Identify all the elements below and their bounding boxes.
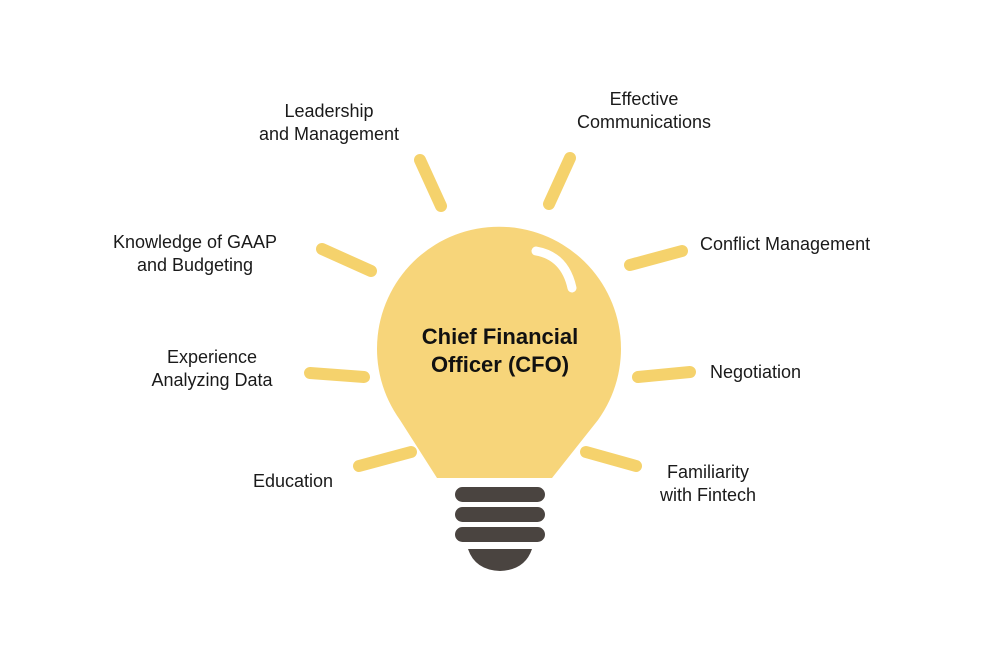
- rays: [310, 158, 690, 466]
- bulb glass: [377, 227, 621, 478]
- label: effective communications: Effective: [610, 89, 678, 109]
- label: experience: [151, 347, 273, 390]
- base: [455, 487, 545, 571]
- highlight: [536, 251, 572, 288]
- label: conflict: Conflict Management: [700, 234, 870, 254]
- label: fintech: [660, 462, 756, 505]
- label: effective communications: Communications: [577, 112, 711, 132]
- label: leadership: [259, 101, 399, 144]
- label: fintech: with Fintech: [660, 485, 756, 505]
- center title: Officer (CFO): [431, 352, 569, 377]
- label: GAAP: [113, 232, 277, 275]
- label: GAAP: Knowledge of GAAP: [113, 232, 277, 252]
- center title: Chief Financial: [422, 324, 578, 349]
- label: effective communications: [577, 89, 711, 132]
- label: experience: Analyzing Data: [151, 370, 273, 390]
- label: GAAP: and Budgeting: [137, 255, 253, 275]
- center title: [422, 324, 578, 377]
- label: education: Education: [253, 471, 333, 491]
- label: fintech: Familiarity: [667, 462, 749, 482]
- label: experience: Experience: [167, 347, 257, 367]
- label: negotiation: Negotiation: [710, 362, 801, 382]
- label: leadership: Leadership: [284, 101, 374, 121]
- label: leadership: and Management: [259, 124, 399, 144]
